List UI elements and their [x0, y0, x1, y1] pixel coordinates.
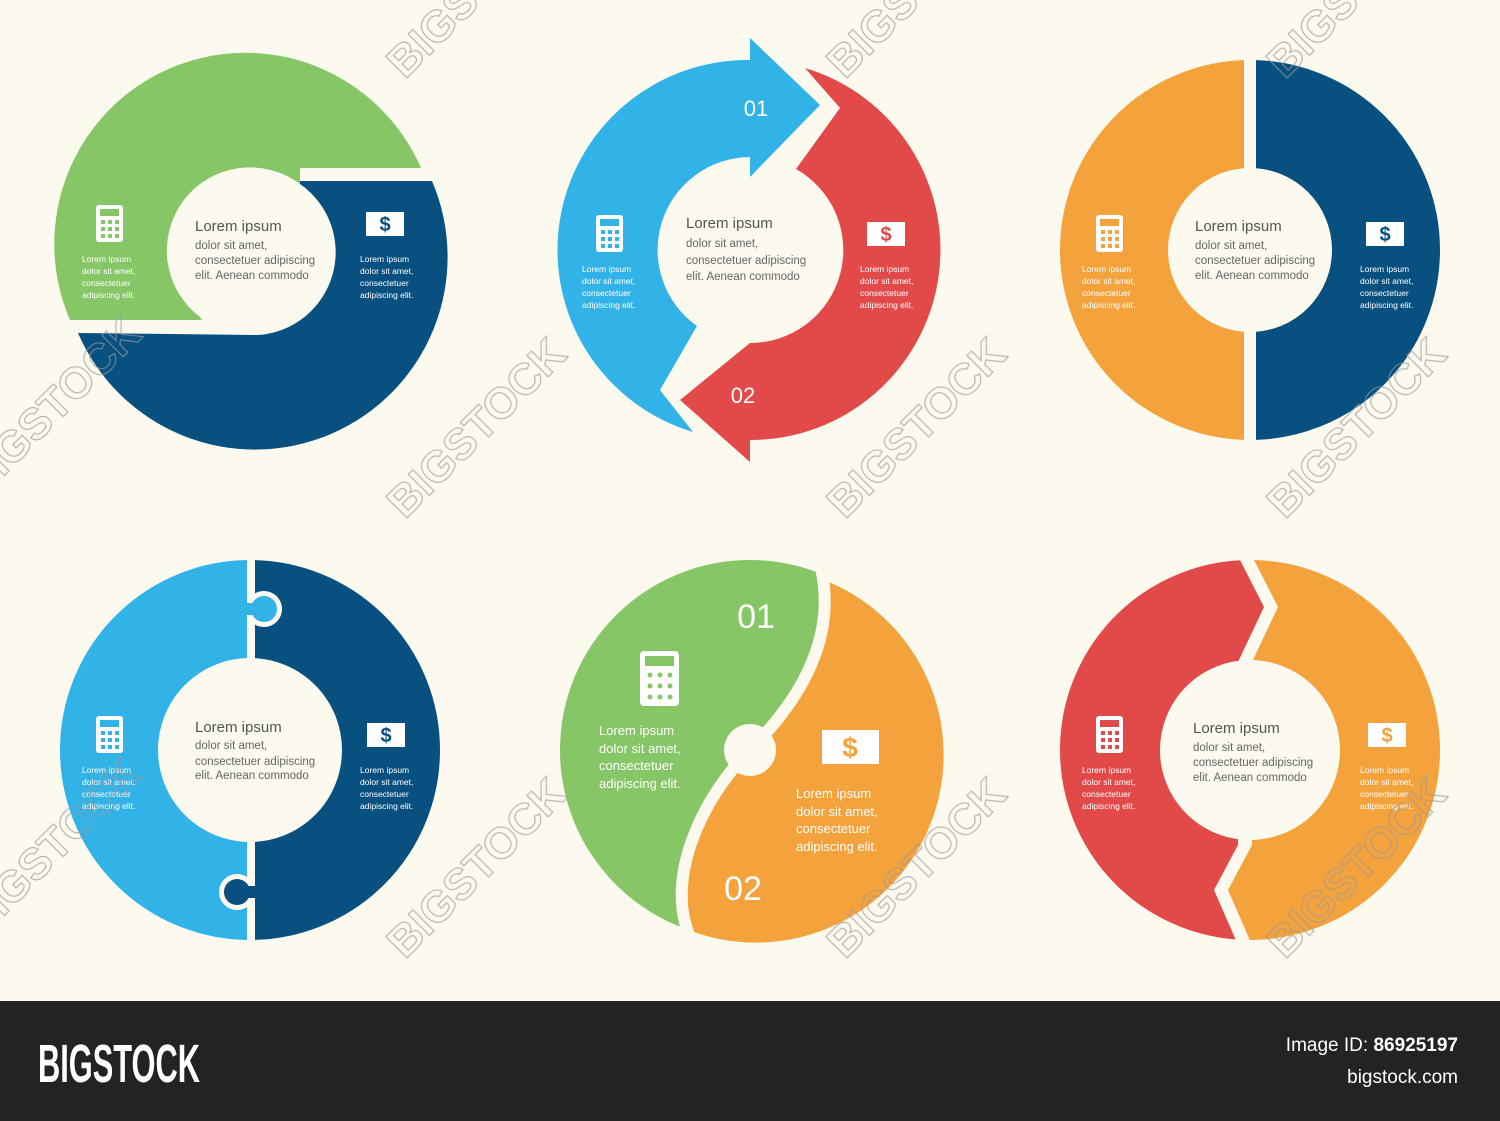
text: right: dolor sit amet, — [1360, 777, 1413, 787]
center node — [724, 724, 776, 776]
text: center: elit. Aenean commodo — [195, 270, 309, 282]
text: left: adipiscing elit. — [1082, 300, 1135, 310]
text: left: dolor sit amet, — [82, 777, 135, 787]
text: right: adipiscing elit. — [1360, 801, 1413, 811]
watermarks: BIGSTOCK — [377, 329, 576, 527]
text: orange: consectetuer — [796, 821, 871, 836]
text: right: Lorem ipsum — [360, 765, 409, 775]
text: left: Lorem ipsum — [82, 765, 131, 775]
text: left: adipiscing elit. — [1082, 801, 1135, 811]
text: right: consectetuer — [1360, 789, 1409, 799]
label 01: 01 — [737, 598, 775, 636]
text: right: dolor sit amet, — [1360, 276, 1413, 286]
icon: calculator — [1096, 215, 1123, 252]
text: right: Lorem ipsum — [1360, 765, 1409, 775]
text: right: Lorem ipsum — [360, 254, 409, 264]
text: right: dolor sit amet, — [860, 276, 913, 286]
text: right: adipiscing elit. — [1360, 300, 1413, 310]
text: left: Lorem ipsum — [82, 254, 131, 264]
footer logo: BIGSTOCK — [38, 1034, 200, 1094]
icon: money — [1368, 723, 1406, 747]
icon: money — [367, 723, 405, 747]
icon: calculator — [596, 215, 623, 252]
text: right: adipiscing elit. — [360, 801, 413, 811]
watermarks: BIGSTOCK — [1257, 769, 1456, 967]
watermarks: BIGSTOCK — [817, 769, 1016, 967]
text: center: Lorem ipsum — [195, 719, 282, 736]
text: green: dolor sit amet, — [599, 741, 681, 756]
text: right: consectetuer — [360, 789, 409, 799]
watermarks: BIGSTOCK — [377, 769, 576, 967]
icon: money: $ — [380, 725, 392, 747]
text: right: adipiscing elit. — [360, 290, 413, 300]
icon: money: $ — [1379, 224, 1391, 246]
text: left: consectetuer — [582, 288, 631, 298]
text: center: elit. Aenean commodo — [1193, 772, 1307, 784]
text: center: elit. Aenean commodo — [1195, 270, 1309, 282]
icon: money: $ — [379, 214, 391, 236]
panel: diagram 2 arrows — [557, 38, 940, 462]
text: right: dolor sit amet, — [360, 266, 413, 276]
panel: diagram 4 puzzle — [82, 596, 413, 905]
text: left: consectetuer — [82, 789, 131, 799]
text: center: consectetuer adipiscing — [195, 255, 315, 267]
text: orange: Lorem ipsum — [796, 786, 871, 801]
icon: money — [822, 730, 879, 764]
text: left: adipiscing elit. — [82, 801, 135, 811]
green segment — [560, 560, 940, 940]
text: center: Lorem ipsum — [1193, 720, 1280, 737]
icon: money: $ — [880, 224, 892, 246]
text: right: consectetuer — [360, 278, 409, 288]
red segment — [1110, 610, 1390, 890]
light blue half — [60, 560, 247, 940]
text: center: consectetuer adipiscing — [1195, 255, 1315, 267]
puzzle tab bottom — [224, 879, 257, 905]
text: right: Lorem ipsum — [860, 264, 909, 274]
panel: diagram 5 yin-yang — [560, 560, 950, 949]
icon: money: $ — [1381, 725, 1393, 747]
text: left: adipiscing elit. — [82, 290, 135, 300]
text: center: dolor sit amet, — [195, 740, 267, 752]
text: right: Lorem ipsum — [1360, 264, 1409, 274]
text: green: adipiscing elit. — [599, 776, 681, 791]
text: right: adipiscing elit. — [860, 300, 913, 310]
text: left: dolor sit amet, — [1082, 276, 1135, 286]
label 01: 01 — [744, 96, 768, 121]
panel: diagram 6 red/orange chevrons — [1082, 610, 1413, 890]
text: center: dolor sit amet, — [1195, 240, 1267, 252]
footer image id: Image ID: 86925197 — [1286, 1035, 1458, 1056]
puzzle tab top — [244, 596, 277, 622]
icon: money: $ — [842, 732, 858, 763]
text: center: dolor sit amet, — [195, 240, 267, 252]
text: right: consectetuer — [1360, 288, 1409, 298]
text: left: consectetuer — [1082, 288, 1131, 298]
icon: money — [366, 212, 404, 236]
orange segment — [1110, 610, 1390, 890]
text: left: Lorem ipsum — [582, 264, 631, 274]
navy segment — [78, 181, 448, 450]
blue arrow 01 — [557, 38, 820, 432]
icon: calculator — [96, 716, 123, 753]
text: orange: dolor sit amet, — [796, 804, 878, 819]
footer url: bigstock.com — [1347, 1067, 1458, 1088]
green segment — [54, 53, 421, 320]
text: center: consectetuer adipiscing — [195, 756, 315, 768]
text: center: Lorem ipsum — [195, 218, 282, 235]
text: orange: adipiscing elit. — [796, 839, 878, 854]
text: left: Lorem ipsum — [1082, 765, 1131, 775]
icon: money — [1366, 222, 1404, 246]
text: green: consectetuer — [599, 758, 674, 773]
icon: calculator — [1096, 716, 1123, 753]
text: center: Lorem ipsum — [1195, 218, 1282, 235]
text: right: dolor sit amet, — [360, 777, 413, 787]
text: left: dolor sit amet, — [582, 276, 635, 286]
label 02: 02 — [724, 870, 762, 908]
text: right: consectetuer — [860, 288, 909, 298]
text: green: Lorem ipsum — [599, 723, 674, 738]
text: left: consectetuer — [1082, 789, 1131, 799]
icon: money — [867, 222, 905, 246]
footer bar — [0, 1001, 1500, 1121]
text: left: consectetuer — [82, 278, 131, 288]
icon: calculator — [640, 651, 679, 706]
panel: diagram 3 orange/navy halves — [1082, 114, 1413, 386]
text: left: Lorem ipsum — [1082, 264, 1131, 274]
red arrow 02 — [680, 68, 940, 462]
navy half — [255, 560, 440, 940]
text: left: adipiscing elit. — [582, 300, 635, 310]
text: center: consectetuer adipiscing — [1193, 757, 1313, 769]
label 02: 02 — [731, 383, 755, 408]
text: center: elit. Aenean commodo — [195, 770, 309, 782]
text: left: dolor sit amet, — [1082, 777, 1135, 787]
text: center: dolor sit amet, — [1193, 742, 1265, 754]
orange half — [1114, 114, 1386, 386]
watermarks: BIGSTOCK — [817, 329, 1016, 527]
text: center: consectetuer adipiscing — [686, 255, 806, 267]
navy half — [1114, 114, 1386, 386]
watermarks: BIGSTOCK — [1257, 329, 1456, 527]
text: left: dolor sit amet, — [82, 266, 135, 276]
text: center: Lorem ipsum — [686, 215, 773, 232]
orange segment — [682, 573, 950, 949]
icon: calculator — [96, 205, 123, 242]
text: center: dolor sit amet, — [686, 238, 758, 250]
text: center: elit. Aenean commodo — [686, 271, 800, 283]
panel: diagram 1 green/navy — [54, 53, 448, 450]
